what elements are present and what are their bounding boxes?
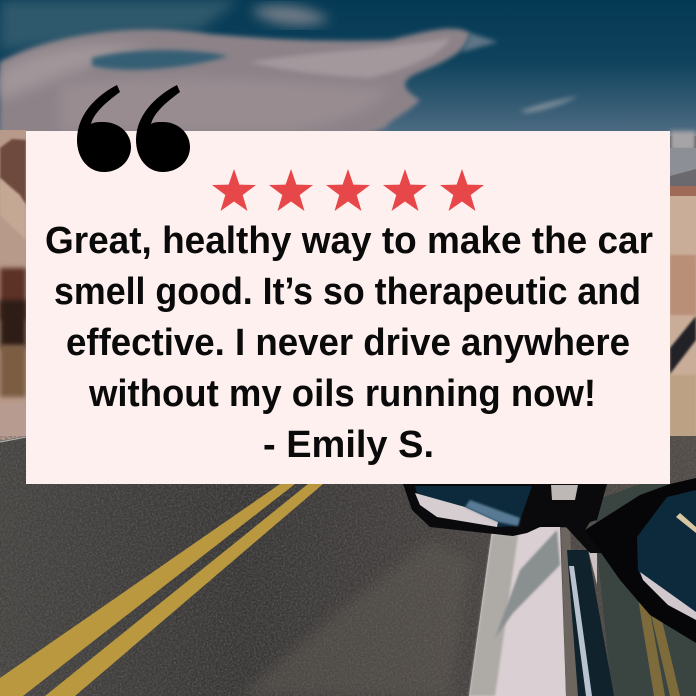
desert right edge [670, 148, 696, 481]
car door [469, 526, 566, 696]
desert left edge [0, 130, 26, 442]
review text: effective. I never drive anywhere [66, 322, 630, 364]
five star rating [212, 169, 484, 211]
review text: Great, healthy way to make the car [45, 220, 653, 262]
road lane markings [0, 484, 323, 696]
testimonial card [26, 131, 670, 484]
window and road reflection [596, 484, 696, 696]
left mirror frame [403, 484, 607, 553]
right mirror glass [637, 490, 696, 620]
clouds [0, 0, 696, 151]
mirror mount detail [551, 485, 578, 500]
left mirror glass [415, 486, 532, 527]
car body and mirrors [403, 478, 696, 696]
review text [45, 220, 653, 415]
door reflection [495, 530, 560, 638]
right mirror frame [585, 478, 696, 643]
review text: smell good. It’s so therapeutic and [54, 271, 641, 313]
door trim [561, 528, 578, 696]
reviewer name: - Emily S. [263, 424, 434, 466]
icon: opening quotation marks [77, 85, 190, 172]
review text: without my oils running now! [88, 373, 596, 415]
road surface [0, 436, 696, 696]
door shadow band [469, 534, 518, 696]
